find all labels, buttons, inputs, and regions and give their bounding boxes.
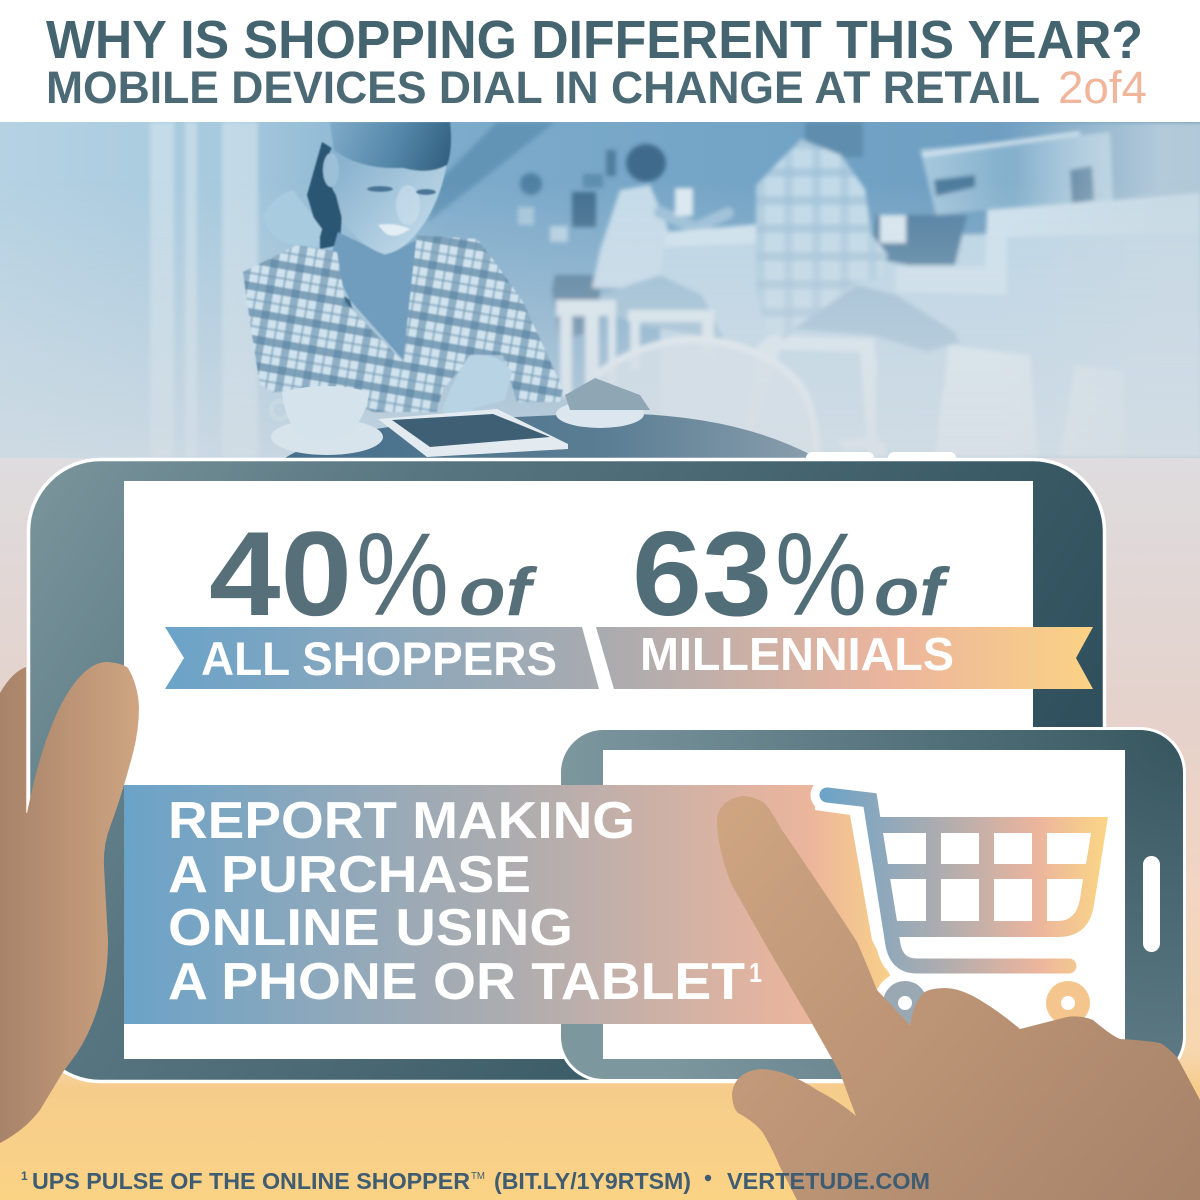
photo background scene: [150, 122, 1200, 458]
ribbon: all shoppers: [165, 627, 599, 689]
of label: of: [874, 554, 951, 630]
ribbon: millennials: [596, 627, 1093, 689]
small phone body: [560, 728, 1184, 1080]
website: VERTETUDE.COM: [727, 1168, 930, 1194]
left hand: [0, 662, 139, 1143]
banner text: 1: [749, 957, 762, 988]
heading line 1: WHY IS SHOPPING DIFFERENT THIS YEAR?: [46, 10, 1143, 70]
cart left wheel outline: [874, 972, 936, 1034]
of label: of: [459, 554, 538, 630]
large phone body: [28, 460, 1104, 1082]
small phone screen: [603, 750, 1125, 1059]
photo tablet: [378, 409, 568, 457]
photo counter: [665, 224, 760, 247]
banner text: A PHONE OR TABLET: [168, 953, 745, 1011]
photo man at counter: [592, 144, 728, 340]
woman ponytail: [307, 142, 343, 249]
large phone screen: [124, 481, 1033, 1059]
separator bullet: [705, 1175, 711, 1181]
woman eyes and mouth: [367, 186, 436, 236]
photo chair: [596, 339, 817, 457]
woman face: [328, 148, 447, 254]
photo man with laptop: [756, 122, 967, 450]
woman chest: [330, 232, 417, 362]
thumb and palm: [0, 662, 139, 1143]
40 number: 40: [209, 507, 352, 641]
trademark: TM: [471, 1171, 485, 1182]
footnote source: UPS PULSE OF THE ONLINE SHOPPER: [32, 1168, 470, 1194]
photo stools: [556, 300, 1125, 457]
woman hair strand: [344, 296, 353, 310]
statistic: 40% of all shoppers: [165, 507, 599, 689]
percent sign: %: [775, 509, 867, 641]
photo table: [285, 413, 817, 458]
photo bottom fade: [0, 180, 1200, 458]
photo sofa: [552, 275, 600, 340]
woman nose highlight: [396, 185, 420, 225]
banner background: [124, 785, 890, 1024]
woman hair: [330, 122, 451, 171]
footnote link: (BIT.LY/1Y9RTSM): [494, 1168, 691, 1194]
series number: 2of4: [1058, 62, 1147, 113]
photo lower wall: [660, 230, 1200, 458]
banner text: [168, 792, 762, 1011]
right hand: [717, 796, 1200, 1200]
small phone: [560, 728, 1184, 1080]
phone buttons: [806, 452, 956, 466]
header band: [0, 0, 1200, 122]
woman shirt left: [243, 245, 373, 412]
cart white outline: [827, 795, 1069, 966]
cart left wheel: [883, 981, 927, 1025]
photo stepped counter: [896, 193, 1200, 295]
footnote marker: 1: [21, 1169, 28, 1183]
statistic: 63% of millennials: [596, 507, 1093, 689]
photo plate and bread: [556, 378, 650, 428]
photo saucer: [271, 419, 383, 455]
photo door frames: [150, 122, 258, 458]
photo coffee cup: [270, 386, 369, 423]
photo right fade: [1000, 122, 1200, 458]
photo: cafe scene: [0, 122, 1200, 458]
percent sign: %: [356, 509, 449, 641]
photo wall: [0, 122, 1200, 458]
banner text: REPORT MAKING: [168, 792, 635, 850]
large phone: [28, 460, 1104, 1082]
rear finger: [0, 667, 26, 1100]
cart basket: [880, 817, 1108, 937]
footnote: [21, 1168, 930, 1194]
woman raised hand: [274, 190, 323, 246]
woman shirt right: [345, 235, 563, 412]
small phone button: [1143, 856, 1160, 952]
cart right wheel: [1046, 981, 1090, 1025]
ribbon label: all shoppers: ALL SHOPPERS: [201, 632, 557, 685]
banner text: ONLINE USING: [168, 899, 573, 957]
63 number: 63: [632, 507, 772, 641]
cart frame: [827, 795, 1069, 966]
ribbon label: millennials: MILLENNIALS: [640, 628, 954, 680]
title: [46, 10, 1147, 113]
icon: shopping cart: [827, 795, 1108, 1034]
photo staircase: [428, 122, 555, 222]
woman hand on tablet: [443, 354, 512, 413]
cart basket windows: [883, 833, 1091, 921]
banner: report text: [124, 785, 890, 1024]
photo metal drum: [920, 132, 1113, 215]
banner text: A PURCHASE: [168, 846, 531, 904]
photo woman: [243, 122, 563, 425]
heading line 2: MOBILE DEVICES DIAL IN CHANGE AT RETAIL: [46, 62, 1040, 113]
woman ear: [323, 153, 339, 187]
photo wall pictures: [518, 150, 616, 242]
